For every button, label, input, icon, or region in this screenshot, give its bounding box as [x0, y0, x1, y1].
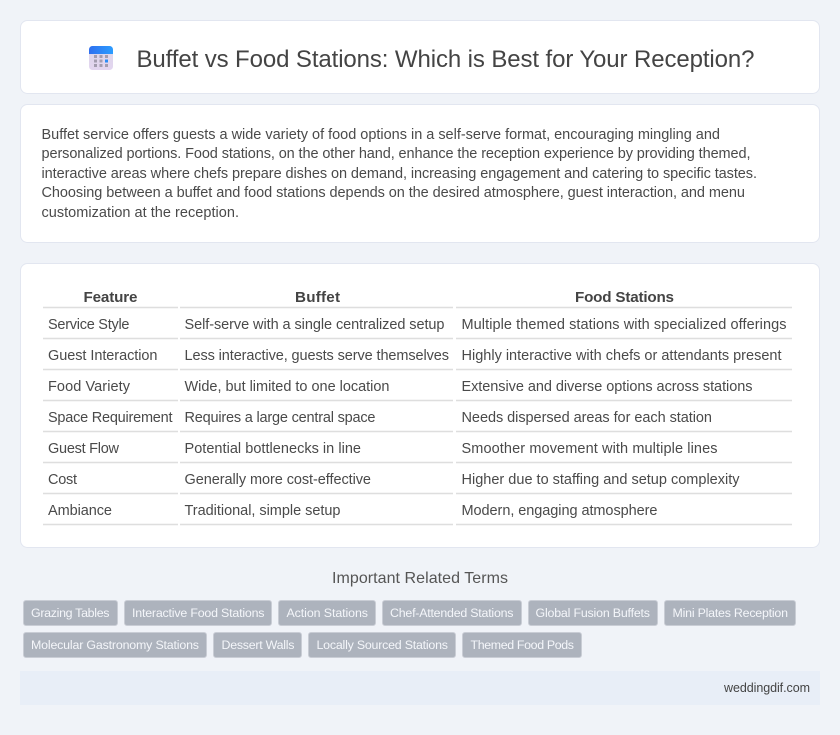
panel: comparison table: [20, 264, 820, 548]
tag: themed food pods: Themed Food Pods: [470, 638, 574, 652]
row: ambiance: Ambiance: [48, 503, 112, 519]
tag: action stations: [278, 600, 376, 626]
row: guest interaction: Highly interactive with chefs or attendants present: [462, 348, 782, 364]
intro paragraph: customization at the reception.: [42, 205, 239, 221]
row: service style: [48, 317, 786, 333]
tag: molecular gastronomy stations: [24, 632, 206, 658]
tag: dessert walls: [214, 632, 302, 658]
tag: themed food pods: [462, 632, 582, 658]
intro paragraph: interactive areas where chefs prepare dishes on demand, increasing engagement and catering to specific tastes.: [42, 166, 757, 182]
row: guest interaction: Less interactive, guests serve themselves: [184, 348, 449, 364]
row: food variety: Extensive and diverse options across stations: [462, 379, 752, 395]
footer source text: weddingdif.com: [723, 681, 810, 695]
intro paragraph: Choosing between a buffet and food stations depends on the desired atmosphere, guest interaction, and menu: [42, 185, 745, 201]
table header: Food Stations: [575, 289, 674, 306]
row: service style: Service Style: [48, 317, 130, 333]
tag: grazing tables: [24, 600, 118, 626]
table header: Buffet: [295, 289, 340, 306]
tag: interactive food stations: Interactive Food Stations: [132, 606, 264, 620]
table header: Feature: [84, 289, 138, 306]
row: ambiance: [48, 503, 658, 519]
row: space requirement: Needs dispersed areas for each station: [462, 410, 712, 426]
footer: [20, 671, 820, 705]
row: space requirement: Space Requirement: [48, 410, 172, 426]
heading: important related terms: Important Related Terms: [332, 570, 508, 587]
tag: grazing tables: Grazing Tables: [31, 606, 110, 620]
row: guest flow: Guest Flow: [48, 441, 120, 457]
panel: intro: [20, 104, 820, 242]
tag: interactive food stations: [124, 600, 272, 626]
table header: [84, 289, 674, 306]
tag: chef-attended stations: Chef-Attended Stations: [390, 606, 514, 620]
tag: action stations: Action Stations: [286, 606, 368, 620]
table rules: [43, 308, 792, 524]
tag: mini plates reception: Mini Plates Reception: [672, 606, 788, 620]
row: guest flow: [48, 441, 718, 457]
title: Buffet vs Food Stations: Which is Best for Your Reception?: [136, 46, 754, 73]
related term tags: [24, 600, 796, 658]
panel: header: [20, 20, 820, 94]
row: guest interaction: [48, 348, 782, 364]
row: cost: Cost: [48, 472, 77, 488]
row: ambiance: Modern, engaging atmosphere: [462, 503, 658, 519]
row: cost: Generally more cost-effective: [184, 472, 371, 488]
row: guest interaction: Guest Interaction: [48, 348, 158, 364]
tag: locally sourced stations: [308, 632, 456, 658]
row: food variety: [48, 379, 752, 395]
intro paragraph: Buffet service offers guests a wide variety of food options in a self-serve format, encouraging mingling and: [42, 127, 720, 143]
tag: chef-attended stations: [382, 600, 522, 626]
tag: mini plates reception: [664, 600, 796, 626]
row: food variety: Wide, but limited to one location: [184, 379, 390, 395]
icon: calendar: [89, 46, 113, 70]
row: guest flow: Potential bottlenecks in line: [184, 441, 361, 457]
intro paragraph: [42, 127, 757, 221]
row: space requirement: Requires a large central space: [184, 410, 376, 426]
row: food variety: Food Variety: [48, 379, 131, 395]
row: guest flow: Smoother movement with multiple lines: [462, 441, 718, 457]
row: cost: Higher due to staffing and setup complexity: [462, 472, 740, 488]
row: ambiance: Traditional, simple setup: [184, 503, 340, 519]
row: service style: Multiple themed stations with specialized offerings: [462, 317, 786, 333]
row: space requirement: [48, 410, 712, 426]
tag: locally sourced stations: Locally Sourced Stations: [316, 638, 448, 652]
row: service style: Self-serve with a single centralized setup: [184, 317, 444, 333]
tag: global fusion buffets: [528, 600, 658, 626]
row: cost: [48, 472, 740, 488]
tag: molecular gastronomy stations: Molecular Gastronomy Stations: [31, 638, 199, 652]
tag: dessert walls: Dessert Walls: [222, 638, 294, 652]
tag: global fusion buffets: Global Fusion Buffets: [536, 606, 650, 620]
intro paragraph: personalized portions. Food stations, on the other hand, enhance the reception experience by providing themed,: [42, 146, 750, 162]
